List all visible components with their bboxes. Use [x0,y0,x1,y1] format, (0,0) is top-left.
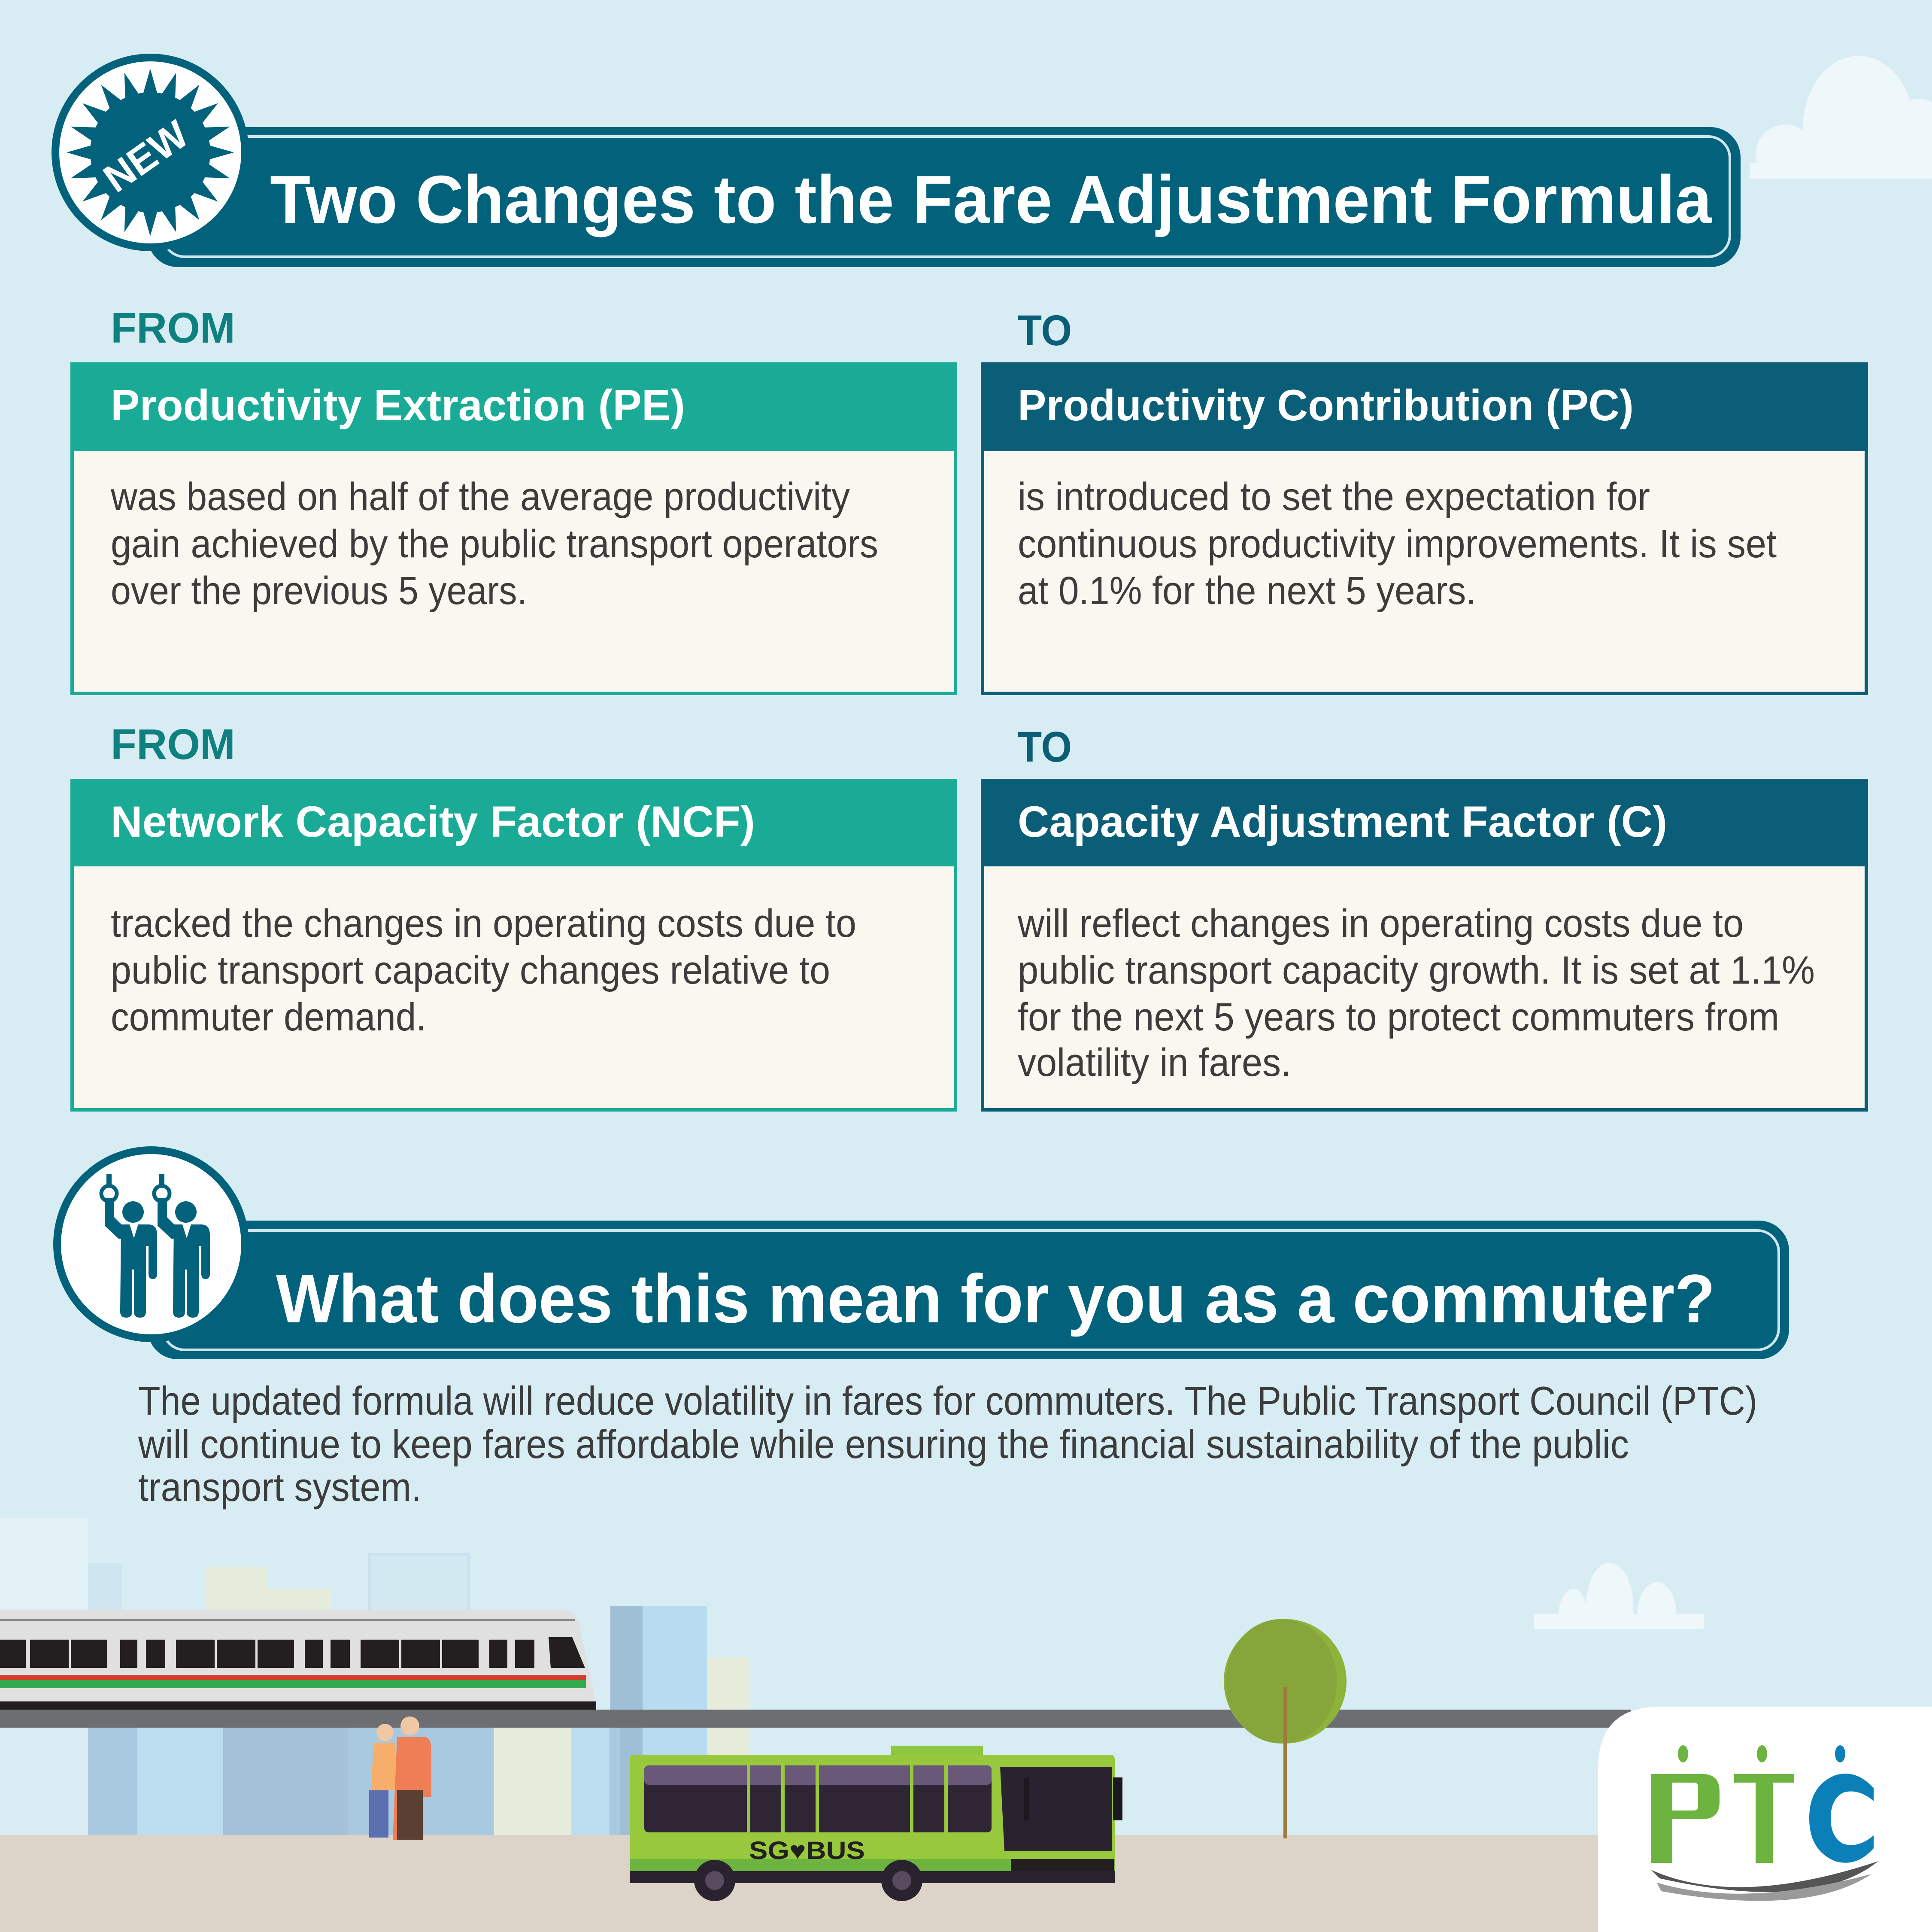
title banner [148,127,1741,267]
cloud: lower right [1534,1563,1704,1629]
elevated track [0,1710,1631,1728]
tree [1224,1619,1347,1838]
train [0,1610,596,1710]
panel: Productivity Contribution [981,362,1868,693]
panel: Productivity Contribution: at 0.1% for the next 5 years. [1018,569,1476,613]
panel: Network Capacity Factor: tracked the changes in operating costs due to [111,902,856,945]
panel: Productivity Contribution: Productivity Contribution (PC) [1018,381,1634,430]
commuter banner [148,1221,1789,1359]
panel: Capacity Adjustment Factor: public transport capacity growth. It is set at 1.1% [1018,948,1815,992]
question heading: What does this mean for you as a commuter? [276,1260,1715,1337]
panel: Network Capacity Factor [70,779,957,1110]
ground [0,1835,1932,1932]
badge: NEW: NEW [96,112,197,201]
panel: Productivity Extraction [70,362,957,693]
panel: Productivity Extraction: over the previous 5 years. [111,569,527,613]
cloud: top right [1750,56,1932,179]
paragraph: will continue to keep fares affordable while ensuring the financial sustainability of the public [138,1422,1629,1467]
panel: Capacity Adjustment Factor: for the next 5 years to protect commuters from [1018,995,1779,1039]
label: TO 1: TO [1018,307,1072,355]
paragraph [138,1378,1757,1510]
icon: commuters holding straps [53,1146,249,1342]
panel: Network Capacity Factor: commuter demand. [111,995,426,1039]
badge: NEW [52,54,249,251]
panel: Network Capacity Factor: Network Capacity Factor (NCF) [111,797,755,846]
paragraph: transport system. [138,1464,422,1510]
panel: Capacity Adjustment Factor: Capacity Adjustment Factor (C) [1018,797,1667,846]
paragraph: The updated formula will reduce volatility in fares for commuters. The Public Transport Council (PTC) [138,1378,1757,1423]
panel: Productivity Contribution: continuous productivity improvements. It is set [1018,522,1777,566]
panel: Productivity Contribution: is introduced to set the expectation for [1018,475,1650,519]
bus [630,1746,1122,1901]
label: FROM 2: FROM [111,720,235,769]
title text: Two Changes to the Fare Adjustment Formula [270,162,1712,237]
logo: PTC [1598,1707,1932,1932]
label: TO 2: TO [1018,723,1072,771]
panel: Capacity Adjustment Factor: will reflect changes in operating costs due to [1017,902,1744,945]
people: elderly couple [369,1716,431,1840]
panel: Capacity Adjustment Factor: volatility in fares. [1018,1041,1291,1084]
panel: Productivity Extraction: gain achieved by the public transport operators [111,522,878,566]
panel: Productivity Extraction: was based on half of the average productivity [110,475,850,519]
background buildings [0,1518,750,1835]
panel: Capacity Adjustment Factor [981,779,1868,1110]
label: FROM 1: FROM [111,304,235,352]
bus: SG♥BUS [749,1837,865,1865]
panel: Network Capacity Factor: public transport capacity changes relative to [111,948,830,992]
panel: Productivity Extraction: Productivity Extraction (PE) [111,381,685,430]
